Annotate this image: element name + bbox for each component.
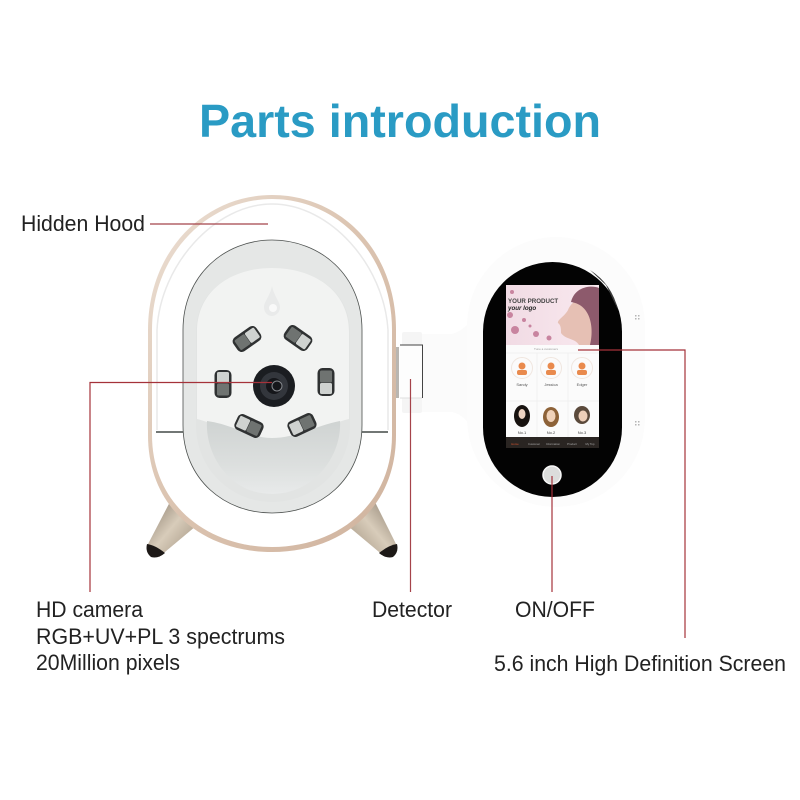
- screen: [506, 285, 599, 448]
- icon: light 3: [214, 370, 232, 398]
- nav labels: [511, 442, 595, 446]
- icon: camera lens: [253, 365, 295, 407]
- label: screen: 5.6 inch High Definition Screen: [494, 651, 786, 676]
- panel dots: [635, 315, 640, 426]
- screen: your logo: [507, 305, 536, 312]
- model labels: No.1: [518, 430, 527, 435]
- label: detector: Detector: [372, 597, 452, 622]
- label: HD camera: RGB+UV+PL 3 spectrums: [36, 624, 285, 649]
- icon: light 2: [282, 323, 314, 353]
- customer names: Jessica: [544, 382, 558, 387]
- inner cavity: [183, 240, 362, 513]
- banner hair: [571, 287, 599, 345]
- callout line: hidden hood: [150, 223, 268, 225]
- icon: light 6: [286, 411, 318, 439]
- caption: Tune a customers: [534, 347, 558, 351]
- model faces: [514, 405, 590, 427]
- icon: light 5: [233, 412, 265, 440]
- customer names: Edger: [577, 382, 588, 387]
- chin rest bowl: [207, 421, 340, 494]
- banner text: YOUR PRODUCT: [508, 298, 558, 305]
- gold outer shell: [148, 195, 396, 552]
- icon: power button: [543, 466, 561, 484]
- nav bar: [506, 437, 599, 448]
- nav labels: My Top: [586, 442, 595, 446]
- hood seam: [156, 431, 388, 433]
- grid lines: [506, 353, 599, 437]
- icon: left leg: [146, 498, 196, 558]
- label: on/off: ON/OFF: [515, 597, 595, 622]
- nav labels: Product: [567, 442, 577, 446]
- black bezel: [483, 262, 622, 497]
- customer names: Sandy: [516, 382, 528, 387]
- callout line: detector: [410, 379, 412, 592]
- nav labels: Information: [546, 442, 560, 446]
- icon: drop sensor: [264, 286, 280, 316]
- nav labels: Home: [511, 442, 519, 446]
- model labels: No.2: [547, 430, 556, 435]
- white shell: [152, 199, 392, 547]
- icon: light 4: [318, 368, 334, 396]
- nav labels: Customer: [528, 442, 540, 446]
- label: hidden hood: Hidden Hood: [21, 211, 145, 236]
- icon: hinge: [400, 332, 423, 413]
- avatar rings: [512, 358, 592, 378]
- callout line: screen: [578, 350, 685, 638]
- white panel: [467, 237, 645, 507]
- customer cards: [517, 362, 587, 375]
- hood edge shading: [157, 204, 388, 430]
- label: HD camera: HD camera: [36, 597, 144, 622]
- cavity inner wall: [196, 268, 350, 502]
- device: analyzer body: [146, 195, 399, 558]
- customer names: [516, 382, 588, 387]
- bezel gloss: [590, 270, 618, 310]
- side detector strip: [396, 347, 399, 398]
- callout line: on/off: [551, 476, 553, 592]
- callout line: HD camera: [90, 382, 272, 592]
- banner blossoms: [507, 290, 552, 340]
- device: screen panel: [420, 237, 645, 507]
- panel arm: [420, 322, 470, 425]
- banner face: [558, 297, 599, 345]
- white camera plate: [197, 268, 349, 438]
- icon: light 1: [231, 324, 263, 354]
- label: HD camera: [36, 597, 285, 675]
- icon: right leg: [348, 498, 398, 558]
- banner: [506, 285, 599, 345]
- label: HD camera: 20Million pixels: [36, 650, 180, 675]
- model labels: No.3: [578, 430, 587, 435]
- model labels: [518, 430, 587, 435]
- title: Parts introduction: [199, 95, 601, 147]
